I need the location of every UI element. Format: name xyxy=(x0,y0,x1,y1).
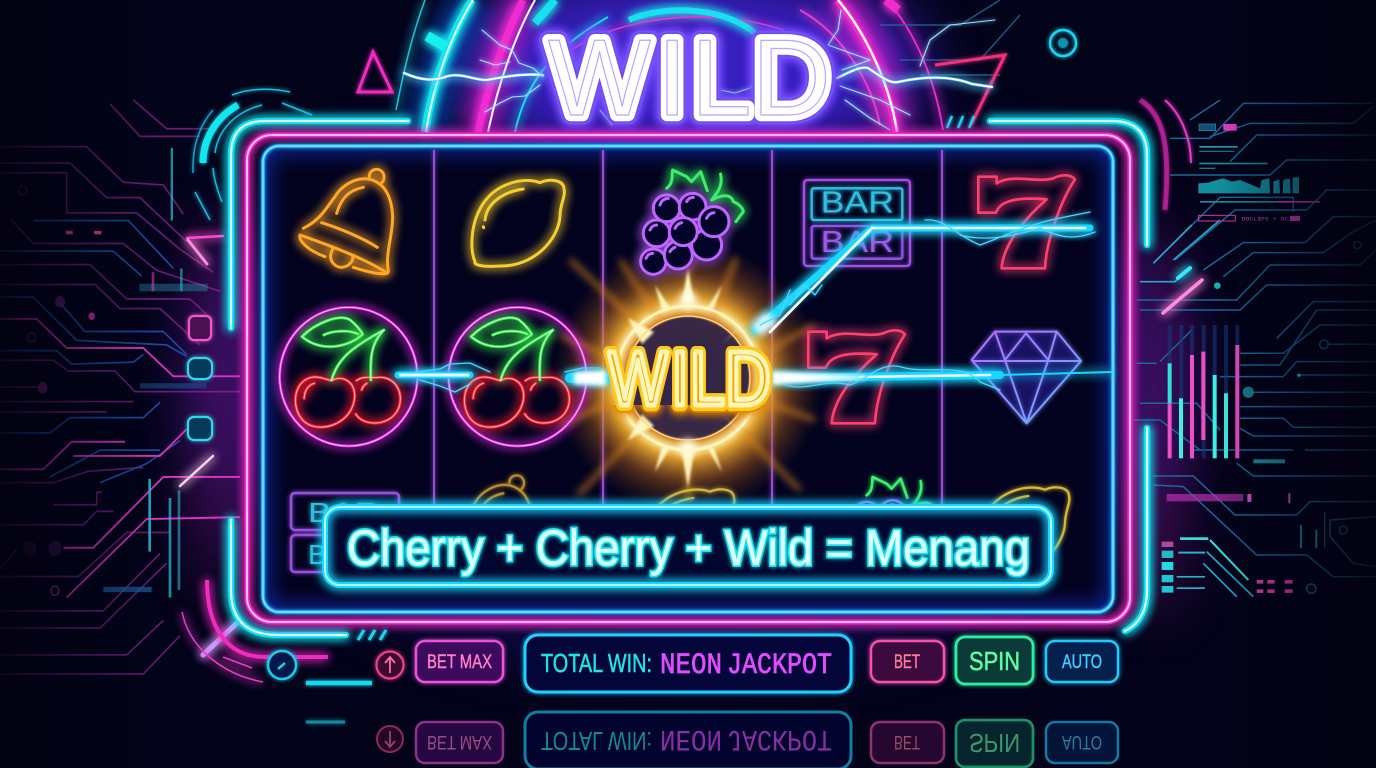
formula callout: Cherry + Cherry + Wild = Menang xyxy=(347,520,1030,576)
win line beam glow xyxy=(398,228,1112,378)
icon: bell xyxy=(300,169,393,274)
HUD bar chart xyxy=(1168,325,1239,458)
icon: partial lemon xyxy=(656,485,738,504)
circuit traces and HUD: right xyxy=(1133,100,1376,597)
floor reflection of control bar: BET xyxy=(894,731,920,752)
button: SPIN xyxy=(956,637,1033,684)
icon: partial grapes xyxy=(854,472,936,504)
lightning around title xyxy=(404,10,995,130)
panel: total win display: JACKPOT xyxy=(727,649,832,683)
button: AUTO: AUTO xyxy=(1062,652,1102,673)
WILD symbol text: WILD xyxy=(608,335,771,421)
corner arcs xyxy=(193,89,1191,220)
icon: partial BAR: BAR xyxy=(308,497,380,528)
icon: grapes xyxy=(641,170,743,274)
panel: total win display: TOTAL WIN: xyxy=(541,648,652,678)
title WILD: WILD xyxy=(548,17,831,139)
row 1 symbols xyxy=(300,169,1075,274)
formula callout: Cherry + Cherry + Wild = Menang xyxy=(347,520,1030,576)
icon: lemon xyxy=(472,180,564,266)
icon: partial BAR: B xyxy=(308,539,327,570)
button: BET MAX: BET MAX xyxy=(427,652,492,673)
icon: cherry right xyxy=(449,307,586,446)
lightning branches xyxy=(415,212,1095,392)
icon: BAR stack: BAR xyxy=(821,225,894,259)
outer core highlights xyxy=(231,121,1147,635)
top neon arcs xyxy=(396,0,1020,160)
title WILD: WILD xyxy=(548,17,831,139)
title WILD: WILD xyxy=(548,17,831,139)
panel: total win display xyxy=(525,635,851,692)
control bar xyxy=(376,635,1118,692)
icon: partial bell xyxy=(470,471,533,504)
neon glints on circuit sides xyxy=(180,236,1202,655)
row 3 partial symbols xyxy=(291,475,1069,581)
formula callout xyxy=(325,507,1051,585)
reel dividers xyxy=(434,150,942,507)
decorative neon triangle and seven shapes xyxy=(358,30,1076,128)
panel: slot frame xyxy=(182,89,1191,682)
button: SPIN: SPIN xyxy=(969,646,1020,676)
icon: seven middle xyxy=(808,330,905,423)
icon: partial lemon right xyxy=(988,482,1074,555)
inner cyan frame xyxy=(263,146,1113,612)
circuit traces: left xyxy=(0,100,240,674)
outer cyan frame xyxy=(231,121,1147,635)
floor reflection of control bar: AUTO xyxy=(1062,731,1102,752)
floor reflection of control bar: BET MAX xyxy=(427,731,492,752)
lower left pink arc xyxy=(182,580,328,682)
panel fill xyxy=(263,146,1113,612)
icon: diamond xyxy=(972,332,1081,423)
button: BET MAX xyxy=(416,641,503,682)
WILD symbol burst xyxy=(553,240,823,513)
title WILD: WILD xyxy=(548,17,831,139)
win line beam core xyxy=(400,228,1085,386)
WILD symbol text: WILD xyxy=(608,335,771,421)
floor reflection of control bar: SPIN xyxy=(969,728,1020,758)
row 2 symbols xyxy=(280,307,1081,446)
button: BET: BET xyxy=(894,652,920,673)
icon: BAR stack xyxy=(804,180,910,266)
panel inner glow xyxy=(263,146,1113,612)
floor reflection of control bar: JACKPOT xyxy=(727,721,832,755)
win lines and lightning xyxy=(398,212,1112,392)
floor reflection of control bar: TOTAL WIN: xyxy=(541,726,652,756)
button: BET xyxy=(871,641,944,682)
icon: BAR stack: BAR xyxy=(821,186,894,220)
WILD symbol text: WILD xyxy=(608,335,771,421)
floor reflection of control bar xyxy=(377,712,1118,768)
panel: total win display: NEON xyxy=(660,649,722,683)
icon: cherry left xyxy=(280,307,417,446)
button: AUTO xyxy=(1046,641,1118,682)
left status icons xyxy=(188,316,212,440)
pink frame xyxy=(247,135,1130,622)
icon: partial BAR xyxy=(291,493,399,572)
floor reflection of control bar: NEON xyxy=(660,721,722,755)
icon: seven top xyxy=(978,175,1075,268)
icon: up arrow button xyxy=(376,652,404,678)
lower left ornaments xyxy=(268,630,386,722)
circuit traces and HUD: right: DOCL$F0 + 0C xyxy=(1242,216,1289,223)
